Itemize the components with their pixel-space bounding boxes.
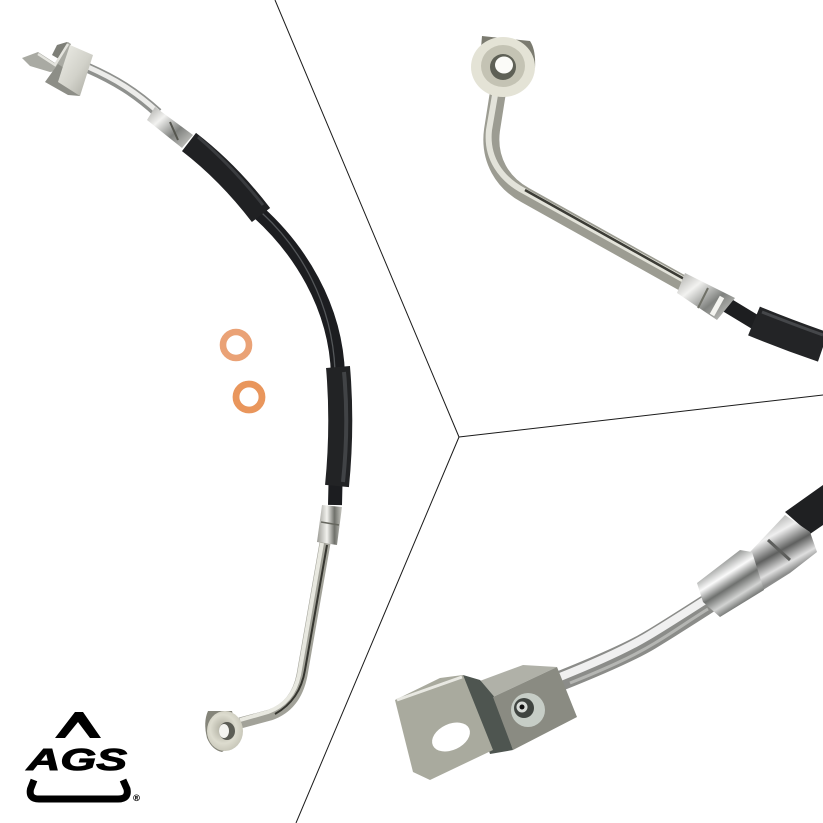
- copper washer 2: [236, 384, 262, 410]
- close-up banjo eye: [471, 36, 535, 97]
- close-up crimped collar: [697, 515, 817, 617]
- upper metal tube: [88, 67, 158, 113]
- upper hose sleeve: [189, 137, 263, 215]
- logo wordmark: AGS: [26, 742, 127, 777]
- bracket slot: [427, 717, 475, 757]
- close-up rubber hose: [722, 302, 823, 347]
- upper crimp fitting: [147, 107, 193, 148]
- thin rubber hose: [258, 212, 338, 505]
- logo bottom bracket: [30, 780, 127, 799]
- lower crimp fitting: [317, 505, 342, 545]
- lower metal tube: [240, 543, 327, 723]
- copper washer 1: [223, 332, 249, 358]
- close-up hose end: [785, 485, 823, 534]
- close-up bracket: [395, 665, 557, 780]
- close-up bent tube: [489, 92, 686, 285]
- panel: banjo fitting close-up: [471, 36, 823, 347]
- lower hose sleeve: [337, 367, 346, 486]
- logo: AGS: [26, 712, 141, 804]
- divider lines between the three panels: [275, 0, 823, 823]
- panel: mounting block close-up: [395, 485, 823, 780]
- close-up crimp fitting: [677, 273, 735, 320]
- panel: full brake hose assembly: [22, 42, 346, 752]
- close-up curved tube: [560, 597, 712, 683]
- registered mark: ®: [132, 794, 141, 804]
- mounting block with bracket: [22, 42, 93, 96]
- close-up threaded block: [493, 667, 577, 750]
- logo top caret: [55, 712, 101, 738]
- banjo eye: [205, 711, 243, 752]
